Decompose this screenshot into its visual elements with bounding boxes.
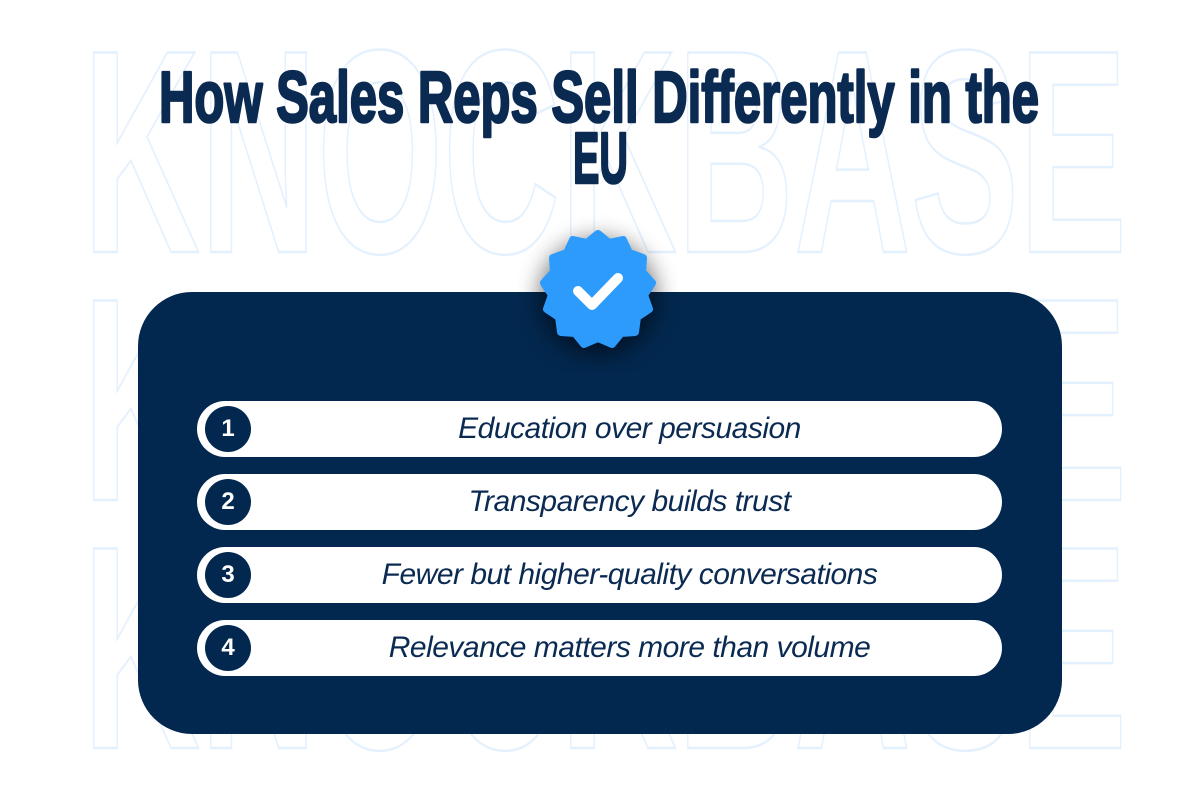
item 4: 4 [221, 634, 235, 661]
item 4 [197, 620, 1002, 676]
panel: list [138, 292, 1062, 734]
item 1: 1 [221, 415, 235, 442]
item 2: 2 [221, 488, 235, 515]
title: EU [573, 119, 628, 199]
item 2: Transparency builds trust [468, 485, 791, 518]
title [159, 58, 1039, 199]
item 2 [197, 474, 1002, 530]
item 4: Relevance matters more than volume [389, 631, 870, 664]
item 3 [197, 547, 1002, 603]
item 3: 3 [221, 561, 235, 588]
item 1 [197, 401, 1002, 457]
icon: check badge [524, 222, 672, 364]
item 3: Fewer but higher-quality conversations [382, 558, 877, 591]
item 1: Education over persuasion [458, 412, 801, 445]
